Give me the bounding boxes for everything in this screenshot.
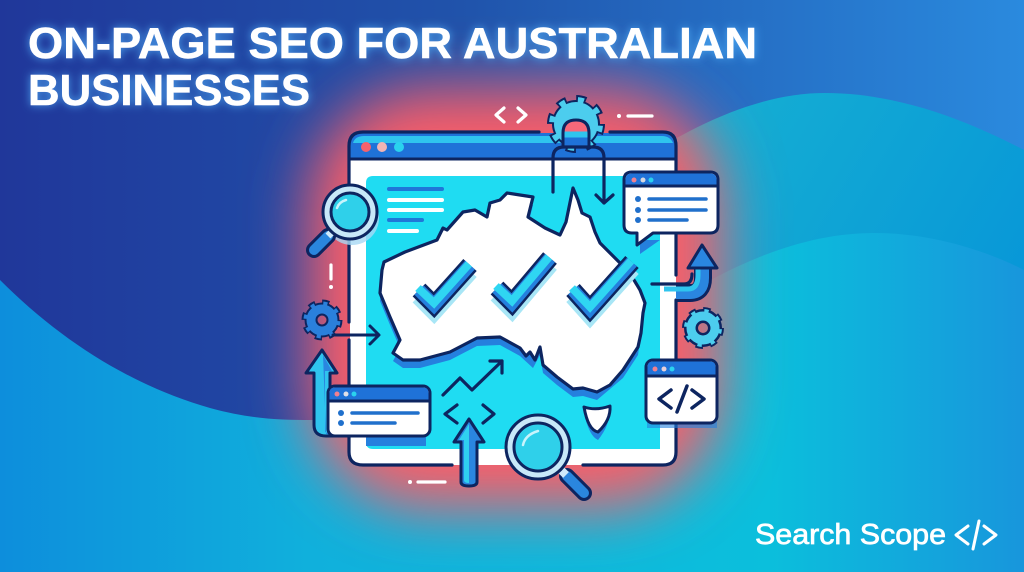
icon: trend arrow — [443, 361, 502, 395]
title — [28, 20, 757, 115]
check marks — [418, 257, 632, 315]
arrow: from gear to map — [333, 326, 379, 344]
gear opening — [563, 120, 589, 146]
map: Australia — [380, 188, 645, 440]
title bar — [350, 133, 676, 159]
window dots — [361, 142, 404, 152]
icon: magnifier top left — [314, 185, 379, 250]
arrow: bottom up — [454, 419, 484, 486]
arrow: left up — [306, 350, 340, 436]
arrow: hook from gear — [553, 147, 613, 203]
window outline — [349, 132, 676, 465]
content panel — [366, 176, 660, 449]
check 2 — [496, 257, 550, 309]
icon: magnifier bottom — [506, 415, 584, 493]
icon: right gear — [687, 312, 719, 344]
title: ON-PAGE SEO FOR AUSTRALIAN — [28, 20, 757, 68]
icon: left gear — [306, 304, 338, 336]
icon: code chevrons — [445, 405, 494, 423]
icon: top gear — [552, 100, 600, 148]
text lines — [389, 189, 442, 231]
check 1 — [418, 264, 470, 311]
browser window — [349, 132, 677, 465]
Tasmania — [584, 406, 610, 440]
title: BUSINESSES — [28, 67, 310, 115]
icon: code card — [646, 360, 717, 428]
icon: bottom left card — [328, 386, 430, 446]
icon: top right card — [624, 172, 718, 254]
arrow: curved up right — [652, 245, 717, 293]
check 3 — [572, 261, 632, 315]
decorative white marks — [329, 108, 652, 484]
logo code symbol — [956, 521, 996, 549]
red glow behind illustration — [308, 88, 722, 508]
logo: Search Scope — [755, 519, 946, 551]
